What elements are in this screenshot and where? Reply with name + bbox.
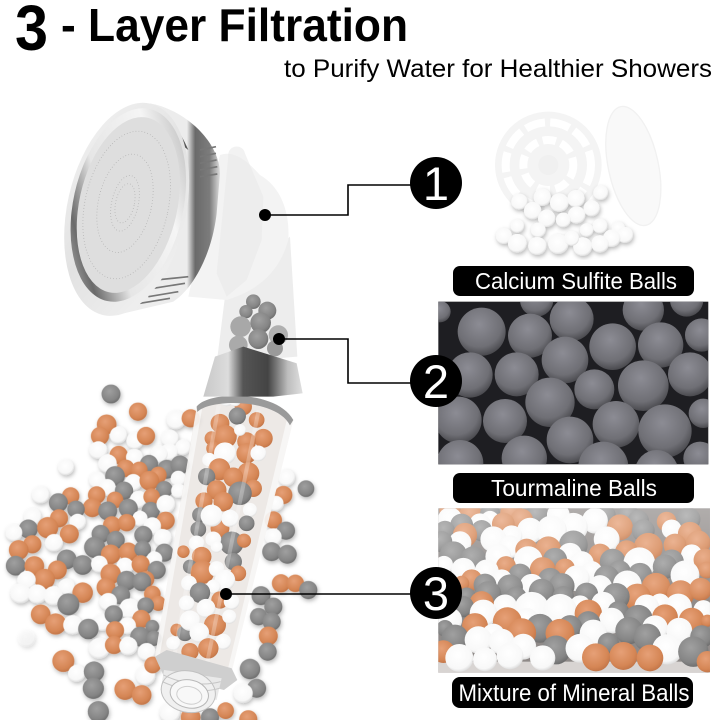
grip ridges	[140, 147, 217, 303]
balls inside tube	[166, 390, 273, 660]
top dark reflection	[153, 107, 188, 150]
subtitle: to Purify Water for Healthier Showers	[284, 55, 712, 83]
callout line 1	[259, 185, 412, 221]
shower head	[45, 91, 288, 328]
shower handle	[217, 237, 297, 363]
callout line 2	[273, 333, 412, 383]
panel: calcium sulfite balls photo	[495, 101, 670, 256]
title text: - Layer Filtration	[61, 0, 408, 51]
tourmaline balls in handle	[229, 294, 288, 356]
spray holes	[70, 123, 184, 287]
number badge 2	[410, 355, 462, 408]
panel: mineral ball mixture photo	[431, 499, 718, 673]
label: calcium sulfite balls: Calcium Sulfite Balls	[475, 268, 677, 294]
scattered mineral balls	[6, 384, 317, 720]
white balls	[496, 185, 633, 256]
filter basket	[495, 101, 670, 231]
number badge 3	[410, 567, 462, 620]
chrome band	[117, 103, 220, 315]
label: mixture of mineral balls: Mixture of Mineral Balls	[458, 680, 690, 707]
number badge 2: 2	[423, 355, 449, 408]
filter tube with mineral balls	[155, 390, 293, 718]
chrome collar	[203, 347, 303, 397]
number badge 1	[410, 157, 462, 210]
number badge 1: 1	[423, 157, 449, 210]
label: tourmaline balls: Tourmaline Balls	[491, 475, 657, 501]
callout line 3	[220, 588, 412, 600]
panel: tourmaline balls photo	[438, 302, 708, 464]
glass highlights	[155, 396, 293, 678]
threaded tube end	[155, 650, 237, 718]
rim and face	[45, 91, 208, 328]
label: tourmaline balls	[453, 473, 694, 503]
number badge 3: 3	[423, 567, 449, 620]
title	[15, 0, 408, 64]
transparent neck	[188, 154, 288, 300]
